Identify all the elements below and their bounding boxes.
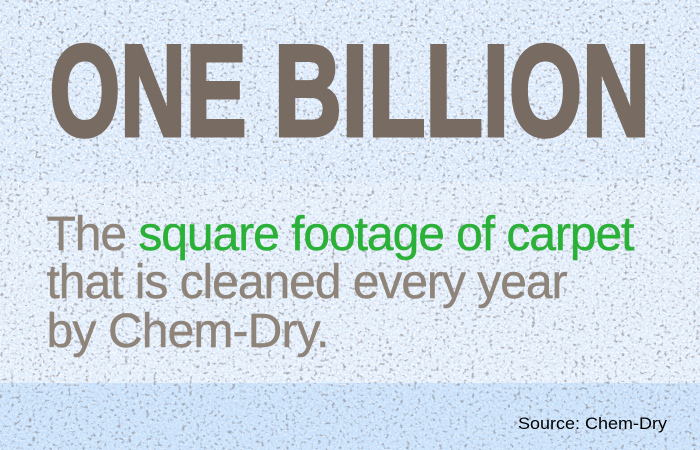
title [50, 18, 650, 164]
description text: The square footage of carpet [46, 208, 634, 261]
source note: Source: Chem-Dry [518, 414, 668, 433]
description text [46, 208, 634, 358]
darker band at bottom [0, 383, 700, 450]
light band behind text [0, 182, 700, 383]
title: ONE [50, 18, 246, 164]
description text: by Chem-Dry. [46, 305, 330, 358]
description text: that is cleaned every year [46, 256, 568, 309]
